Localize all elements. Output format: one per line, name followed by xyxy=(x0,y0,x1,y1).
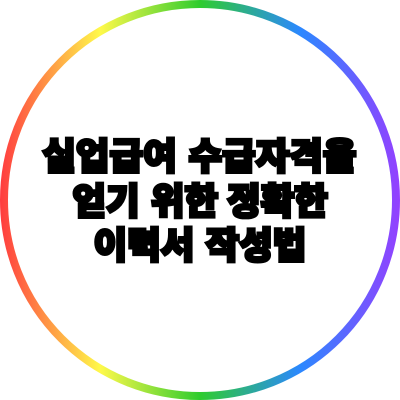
title xyxy=(42,136,356,266)
title line 1: 수급자격을 xyxy=(189,136,356,177)
title line 2 xyxy=(72,181,328,222)
title line 3: 작성법 xyxy=(206,225,306,266)
title line 1: 실업급여 xyxy=(42,136,177,177)
title line 1 xyxy=(42,136,356,177)
title line 3 xyxy=(94,225,306,266)
title line 2: 얻기 xyxy=(72,181,140,222)
title line 2: 정확한 xyxy=(227,181,328,222)
title line 3: 이력서 xyxy=(94,225,194,266)
title line 2: 위한 xyxy=(151,181,218,222)
